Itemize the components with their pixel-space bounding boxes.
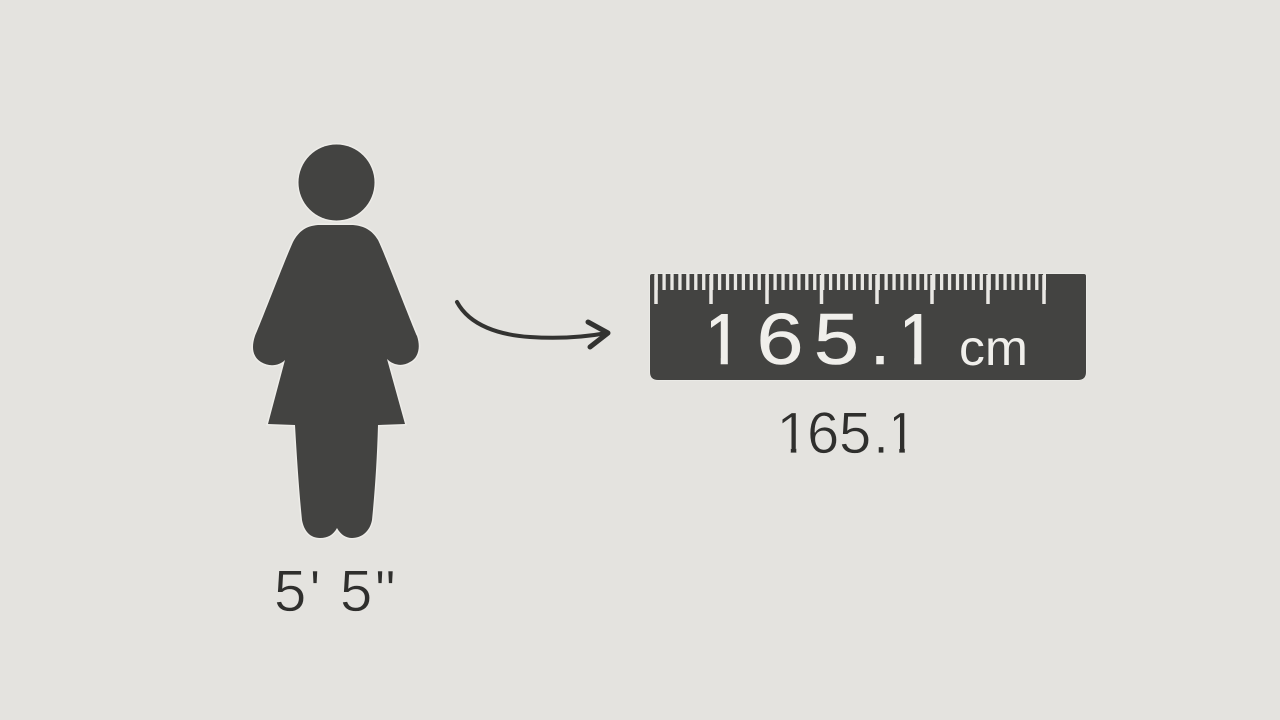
ruler reading digits: 1 <box>703 300 743 380</box>
ruler reading unit: cm <box>959 320 1028 376</box>
label: height in centimetres: 6 <box>807 401 839 466</box>
icon: person silhouette <box>253 144 419 538</box>
ruler <box>650 274 1086 380</box>
ruler minor ticks <box>654 274 1046 290</box>
person body <box>253 225 419 538</box>
ruler reading digits: 5 <box>814 300 859 380</box>
label: height in centimetres: 1 <box>776 401 809 466</box>
ruler major ticks <box>656 275 1044 304</box>
person head <box>298 144 374 220</box>
arrow: feet to centimetres <box>457 302 608 347</box>
ruler reading digits <box>711 313 922 365</box>
ruler body <box>650 274 1086 380</box>
label: height in centimetres <box>782 412 905 454</box>
label: height in centimetres: 5 <box>839 401 871 466</box>
ruler reading digits: 1 <box>896 300 937 380</box>
ruler reading digits: . <box>870 300 890 380</box>
label: height in feet and inches: 5' 5" <box>274 559 396 624</box>
label: height in centimetres: 1 <box>885 401 917 466</box>
label: height in centimetres: . <box>873 401 889 466</box>
ruler reading digits: 6 <box>756 300 804 380</box>
